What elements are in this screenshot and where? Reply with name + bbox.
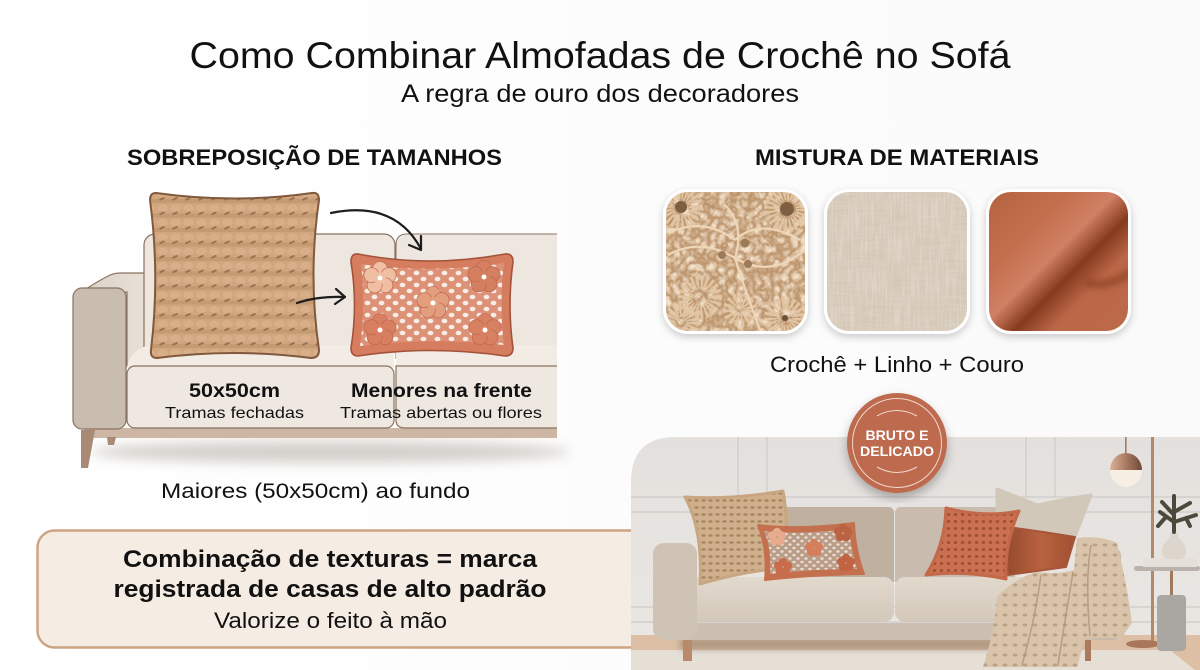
callout heading: Combinação de texturas = marca bbox=[123, 546, 538, 573]
sofa back bbox=[785, 507, 1015, 582]
rug bbox=[631, 650, 1195, 670]
floor bbox=[631, 635, 1200, 670]
label: 50x50cm: 50x50cm bbox=[189, 381, 280, 402]
pillow: small with flowers bbox=[351, 254, 513, 356]
badge text: BRUTO E bbox=[866, 428, 928, 443]
heading: sobreposição de tamanhos: SOBREPOSIÇÃO DE TAMANHOS bbox=[127, 145, 502, 170]
pillow: tan crochet bbox=[685, 491, 786, 584]
callout subtext: Valorize o feito à mão bbox=[214, 608, 447, 633]
swatch: crochê bbox=[663, 189, 808, 334]
swatch: couro bbox=[986, 189, 1135, 334]
subtitle: A regra de ouro dos decoradores bbox=[401, 80, 799, 108]
floor lamp bbox=[1110, 437, 1160, 648]
pillow: large crochet bbox=[150, 193, 319, 358]
label: menores na frente: Menores na frente bbox=[351, 381, 532, 402]
sofa drawing bbox=[73, 234, 570, 468]
arrow: lower bbox=[297, 289, 345, 304]
caption: maiores ao fundo: Maiores (50x50cm) ao fundo bbox=[161, 480, 470, 503]
swatch: linho bbox=[824, 189, 970, 334]
badge text: DELICADO bbox=[860, 444, 934, 459]
arrow: top curved bbox=[331, 210, 421, 250]
callout heading bbox=[114, 546, 546, 603]
beige pillow bbox=[997, 489, 1091, 537]
callout heading: registrada de casas de alto padrão bbox=[114, 576, 546, 603]
side table bbox=[1134, 496, 1200, 651]
pillow: orange crochet bbox=[926, 508, 1019, 579]
label: tramas abertas ou flores: Tramas abertas ou flores bbox=[340, 405, 542, 422]
sofa shadow bbox=[678, 640, 990, 653]
title: Como Combinar Almofadas de Crochê no Sofá bbox=[190, 35, 1011, 76]
badge text bbox=[860, 428, 934, 459]
pillow: floral bbox=[758, 523, 864, 580]
heading: mistura de materiais: MISTURA DE MATERIAIS bbox=[755, 145, 1039, 170]
callout: combinação de texturas bbox=[38, 530, 658, 648]
wall bbox=[631, 437, 1200, 635]
panel: sofa illustration bbox=[73, 193, 570, 468]
panel: living room scene bbox=[631, 437, 1200, 670]
caption: materiais: Crochê + Linho + Couro bbox=[770, 352, 1024, 377]
leather pillow bbox=[1007, 528, 1075, 575]
throw blanket bbox=[983, 537, 1132, 667]
badge: bruto e delicado bbox=[847, 393, 947, 493]
sofa seats and base bbox=[653, 543, 1121, 661]
label: tramas fechadas: Tramas fechadas bbox=[165, 405, 304, 422]
